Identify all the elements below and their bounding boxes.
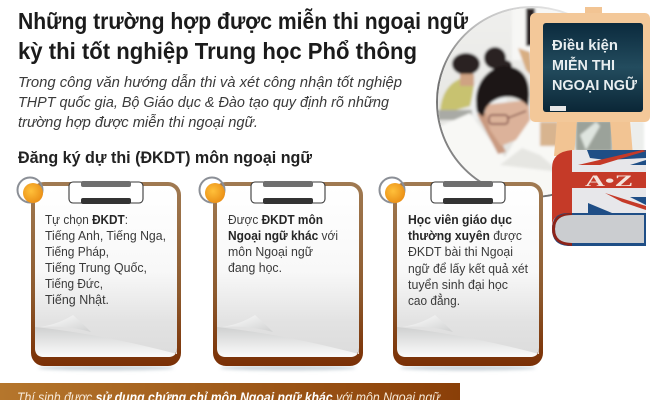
card 1 text: Tiếng Trung Quốc,: [45, 261, 147, 275]
card 3 text: [408, 213, 529, 308]
card 2 text: [228, 213, 338, 275]
card 3 text: Học viên giáo dục: [408, 213, 512, 227]
card 1 text: Tiếng Đức,: [45, 277, 103, 291]
intro text: trường hợp được miễn thi ngoại ngữ.: [18, 114, 258, 131]
card 3 text: ngữ để lấy kết quả xét: [408, 262, 529, 276]
icon: chalkboard: NGOẠI NGỮ: [552, 76, 638, 94]
card 1 text: Tiếng Anh, Tiếng Nga,: [45, 229, 166, 243]
panel: card 1: [18, 178, 181, 370]
intro text: Trong công văn hướng dẫn thi và xét công nhận tốt nghiệp: [18, 74, 402, 91]
card 3 text: cao đẳng.: [408, 293, 460, 308]
card 2 text: Ngoại ngữ khác với: [228, 229, 338, 243]
card 1 text: Tiếng Pháp,: [45, 245, 109, 259]
card 1 text: Tự chọn ĐKDT:: [45, 213, 128, 227]
icon: English dictionary book: A•Z: [585, 173, 633, 190]
icon: English dictionary book: [552, 150, 646, 246]
callout bar: [0, 383, 460, 400]
panel: card 3: [380, 178, 543, 370]
title: Những trường hợp được miễn thi ngoại ngữ: [18, 7, 468, 34]
card 2 text: môn Ngoại ngữ: [228, 245, 313, 259]
card 1 text: [45, 213, 166, 307]
card 3 text: thường xuyên được: [408, 229, 522, 243]
photo: students taking an exam: [436, 6, 612, 198]
icon: chalkboard: MIỄN THI: [552, 57, 615, 74]
intro text: [18, 74, 402, 131]
photo: background strip behind the easel: [576, 121, 644, 151]
section heading: Đăng ký dự thi (ĐKDT) môn ngoại ngữ: [18, 149, 312, 167]
title: [18, 7, 468, 64]
intro text: THPT quốc gia, Bộ Giáo dục & Đào tạo quy định rõ những: [18, 94, 390, 111]
icon: chalkboard: Điều kiện: [552, 37, 618, 54]
title: kỳ thi tốt nghiệp Trung học Phổ thông: [18, 38, 417, 64]
card 3 text: ĐKDT bài thi Ngoại: [408, 245, 513, 259]
card 2 text: Được ĐKDT môn: [228, 213, 323, 227]
card 2 text: đang học.: [228, 261, 282, 275]
panel: card 2: [200, 178, 363, 370]
card 1 text: Tiếng Nhật.: [45, 293, 109, 307]
icon: chalkboard: [530, 7, 650, 156]
card 3 text: tuyển sinh đại học: [408, 278, 508, 292]
